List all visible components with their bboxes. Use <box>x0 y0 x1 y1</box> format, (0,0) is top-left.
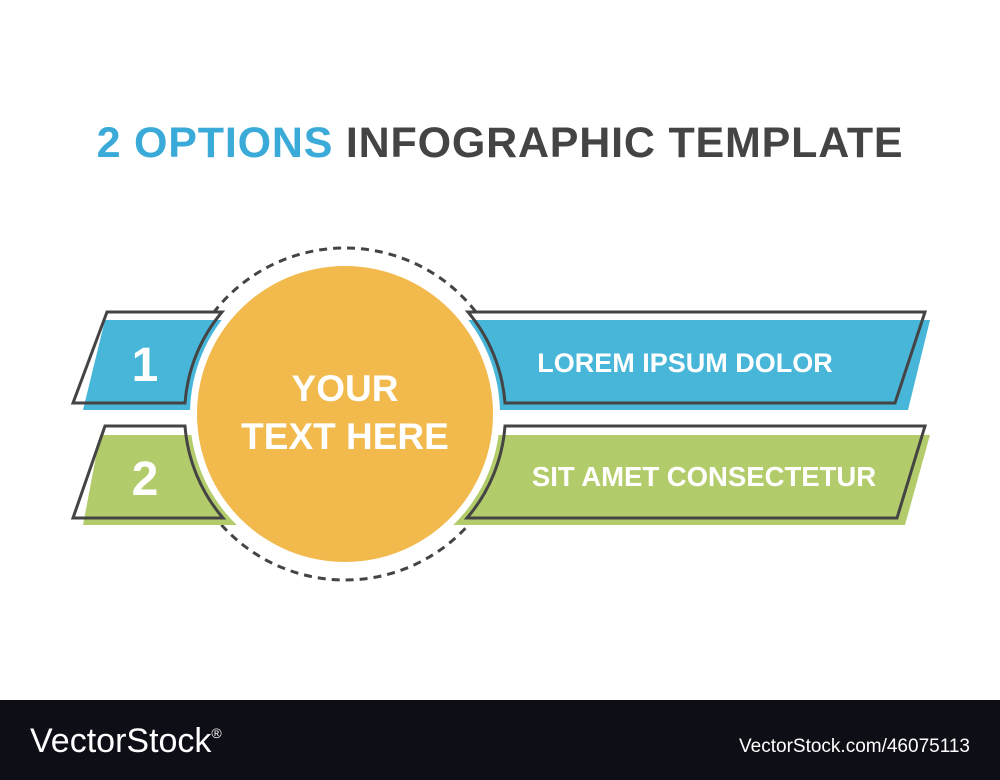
number 2: 2 <box>132 453 158 506</box>
band outlines <box>73 312 925 518</box>
dashed ring <box>170 248 520 580</box>
footer bar <box>0 700 1000 780</box>
option 2 band <box>83 435 930 525</box>
footer bar: ® <box>211 725 222 741</box>
center circle <box>190 259 500 569</box>
option 1 band <box>83 320 930 410</box>
footer bar: VectorStock <box>30 722 211 760</box>
label 1: LOREM IPSUM DOLOR <box>537 348 833 378</box>
footer bar: VectorStock.com/46075113 <box>739 736 970 757</box>
number 1: 1 <box>132 339 158 392</box>
center circle: YOUR <box>292 368 398 409</box>
title: 2 OPTIONS INFOGRAPHIC TEMPLATE <box>97 119 903 167</box>
label 2: SIT AMET CONSECTETUR <box>532 461 876 492</box>
center circle: TEXT HERE <box>241 416 449 457</box>
